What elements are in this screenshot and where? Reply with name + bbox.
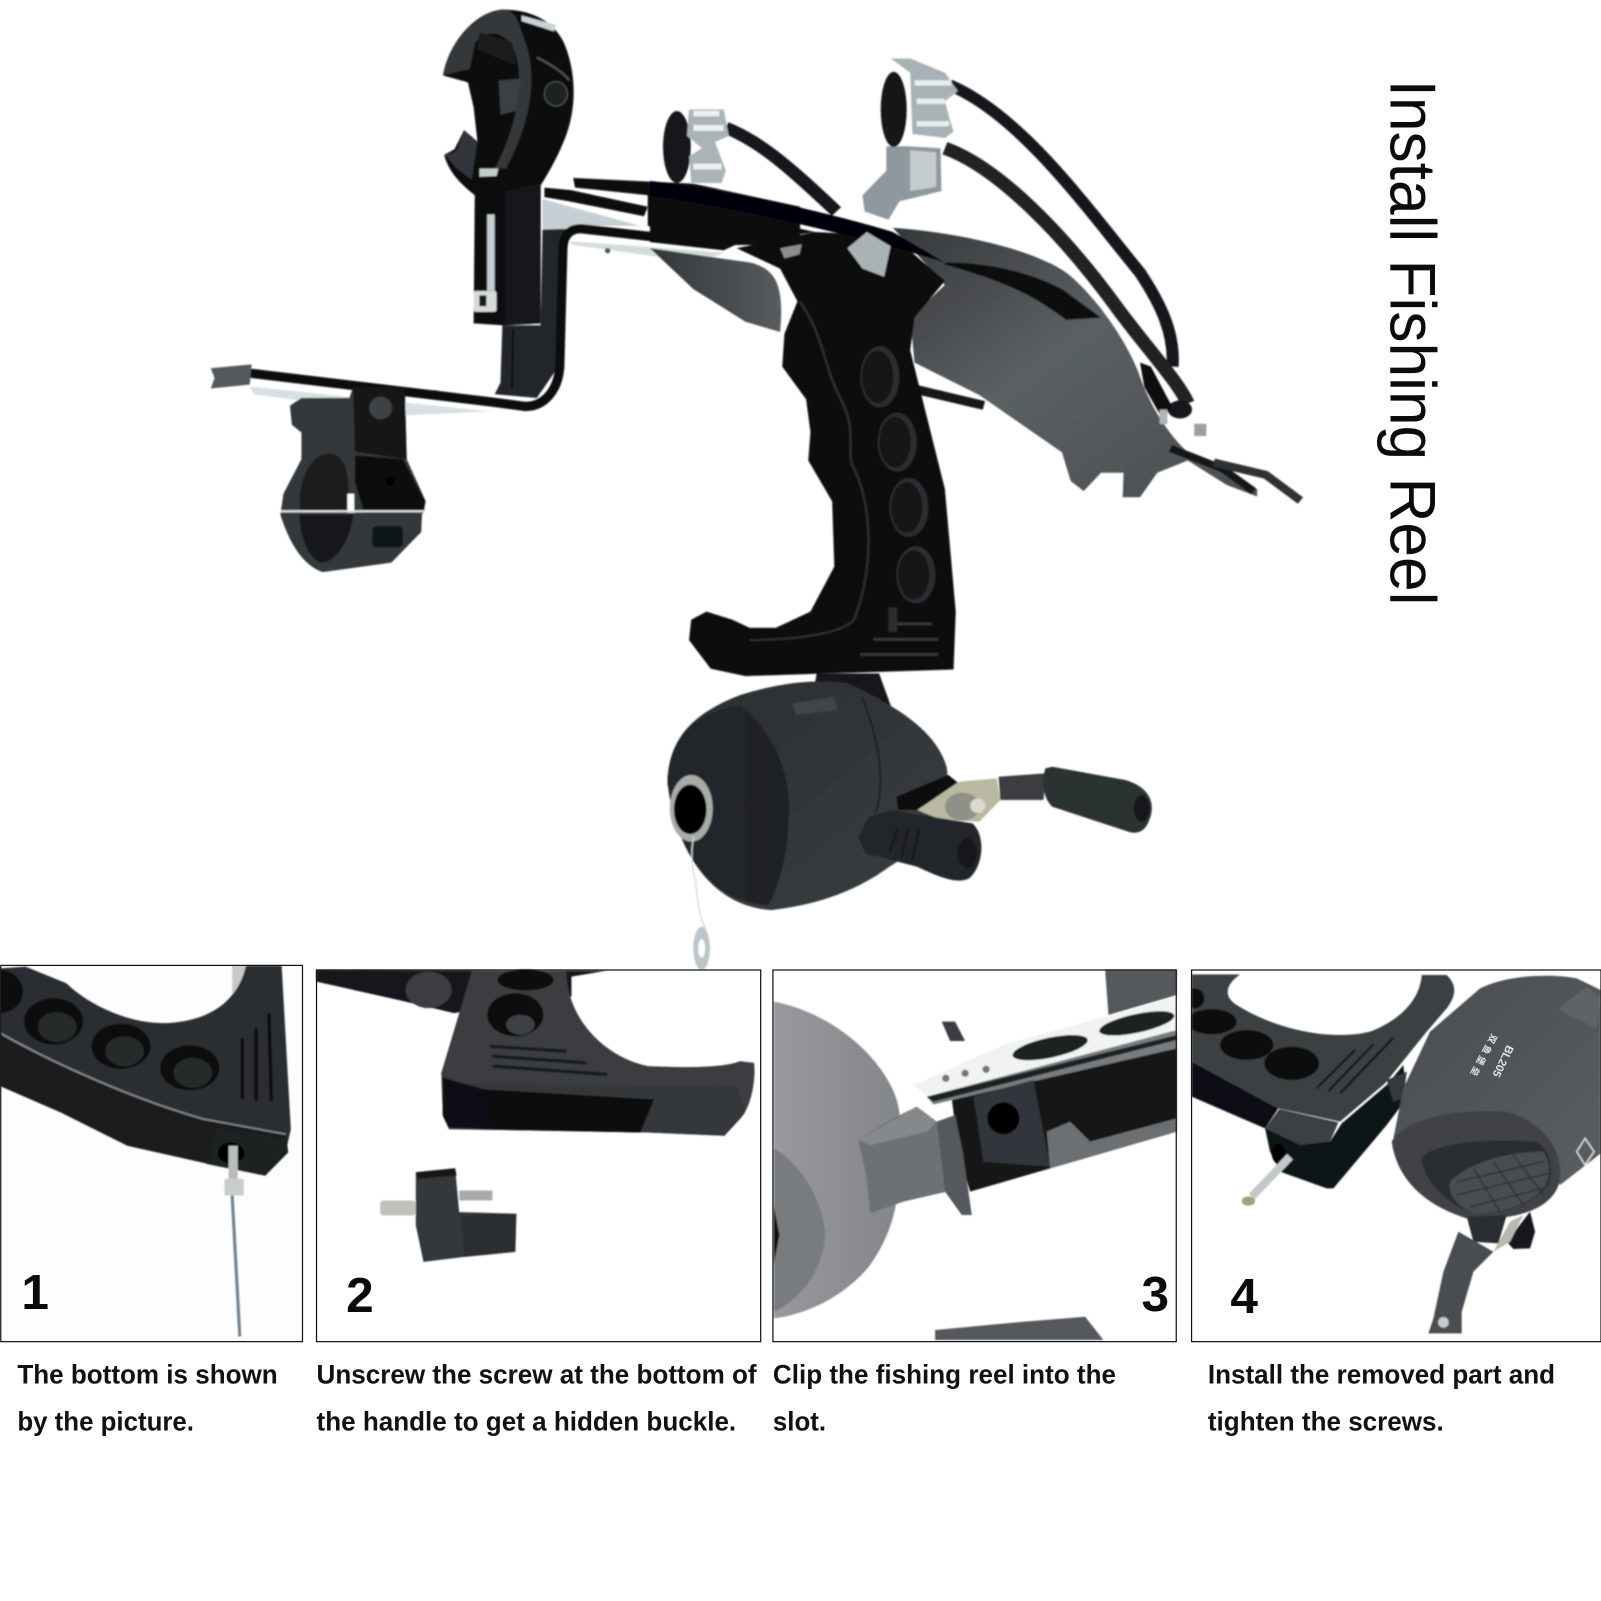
- far tube anchor: [1140, 363, 1173, 418]
- caption: step 2: Unscrew the screw at the bottom of: [317, 1360, 757, 1390]
- loose part: [935, 1317, 1103, 1340]
- grip holes: [860, 346, 899, 407]
- step 2 photo: [316, 969, 754, 1136]
- allen key: [1272, 1143, 1285, 1163]
- lower barrel clamp: [280, 387, 426, 572]
- number 2: 2: [346, 1269, 374, 1323]
- panel: step 1: [0, 965, 302, 1342]
- silver yoke: [862, 146, 941, 220]
- far handle knob: [1043, 767, 1152, 833]
- line guide: [670, 775, 713, 842]
- back strap: [915, 389, 984, 405]
- forearm wing: [893, 228, 1257, 497]
- rubber tubes: [726, 128, 836, 211]
- right pad and clamp: [881, 72, 907, 147]
- near handle knob: [858, 810, 981, 881]
- crank arm: [1507, 1212, 1535, 1249]
- handle grip: [689, 232, 956, 676]
- reel model marking: BL205: [1490, 1043, 1515, 1079]
- number 1: 1: [21, 1266, 49, 1320]
- title: Install Fishing Reel: [1377, 80, 1450, 605]
- spincast reel: [668, 673, 1152, 970]
- caption: step 4: tighten the screws.: [1208, 1406, 1444, 1436]
- caption: step 2: [317, 1360, 757, 1436]
- top plate: [650, 181, 945, 263]
- grip: [1192, 974, 1454, 1122]
- step 1 photo: [0, 966, 291, 1336]
- fork ends: [1170, 448, 1254, 491]
- panel: step 3: [773, 970, 1177, 1342]
- caption: step 2: the handle to get a hidden buckle.: [317, 1406, 736, 1436]
- number 4: 4: [1230, 1270, 1258, 1324]
- caption: step 3: Clip the fishing reel into the: [773, 1360, 1116, 1390]
- caption: step 3: slot.: [773, 1406, 826, 1436]
- step 3 photo: [774, 970, 1177, 1340]
- caption: step 3: [773, 1360, 1116, 1436]
- panel: step 4: [1186, 970, 1601, 1342]
- reel model marking: [1467, 1032, 1515, 1081]
- caption: step 4: Install the removed part and: [1208, 1360, 1555, 1390]
- line and swivel: [692, 837, 706, 930]
- reel dome: [774, 1002, 900, 1318]
- number 3: 3: [1142, 1268, 1169, 1322]
- caption: step 1: [17, 1360, 278, 1436]
- crank: [896, 775, 959, 810]
- silver plate: [913, 997, 1177, 1098]
- caption: step 1: by the picture.: [17, 1406, 194, 1436]
- top ring clamp: [443, 10, 574, 325]
- frame body: [952, 1045, 1177, 1192]
- slingshot frame: [650, 58, 1300, 676]
- reel body: [1393, 976, 1601, 1185]
- step 2 removed buckle and screw: [380, 1168, 516, 1262]
- caption: step 4: [1208, 1360, 1555, 1436]
- step 4 photo: [1186, 974, 1601, 1333]
- reel mount bracket: [211, 10, 800, 572]
- reel model marking: 双鱼堡垒: [1467, 1032, 1500, 1081]
- reel neck: [858, 1106, 946, 1214]
- product: slingshot with fishing reel: [211, 10, 1300, 970]
- left pad and clamp: [663, 111, 691, 183]
- caption: step 1: The bottom is shown: [17, 1360, 278, 1390]
- panel: step 2: [316, 969, 761, 1342]
